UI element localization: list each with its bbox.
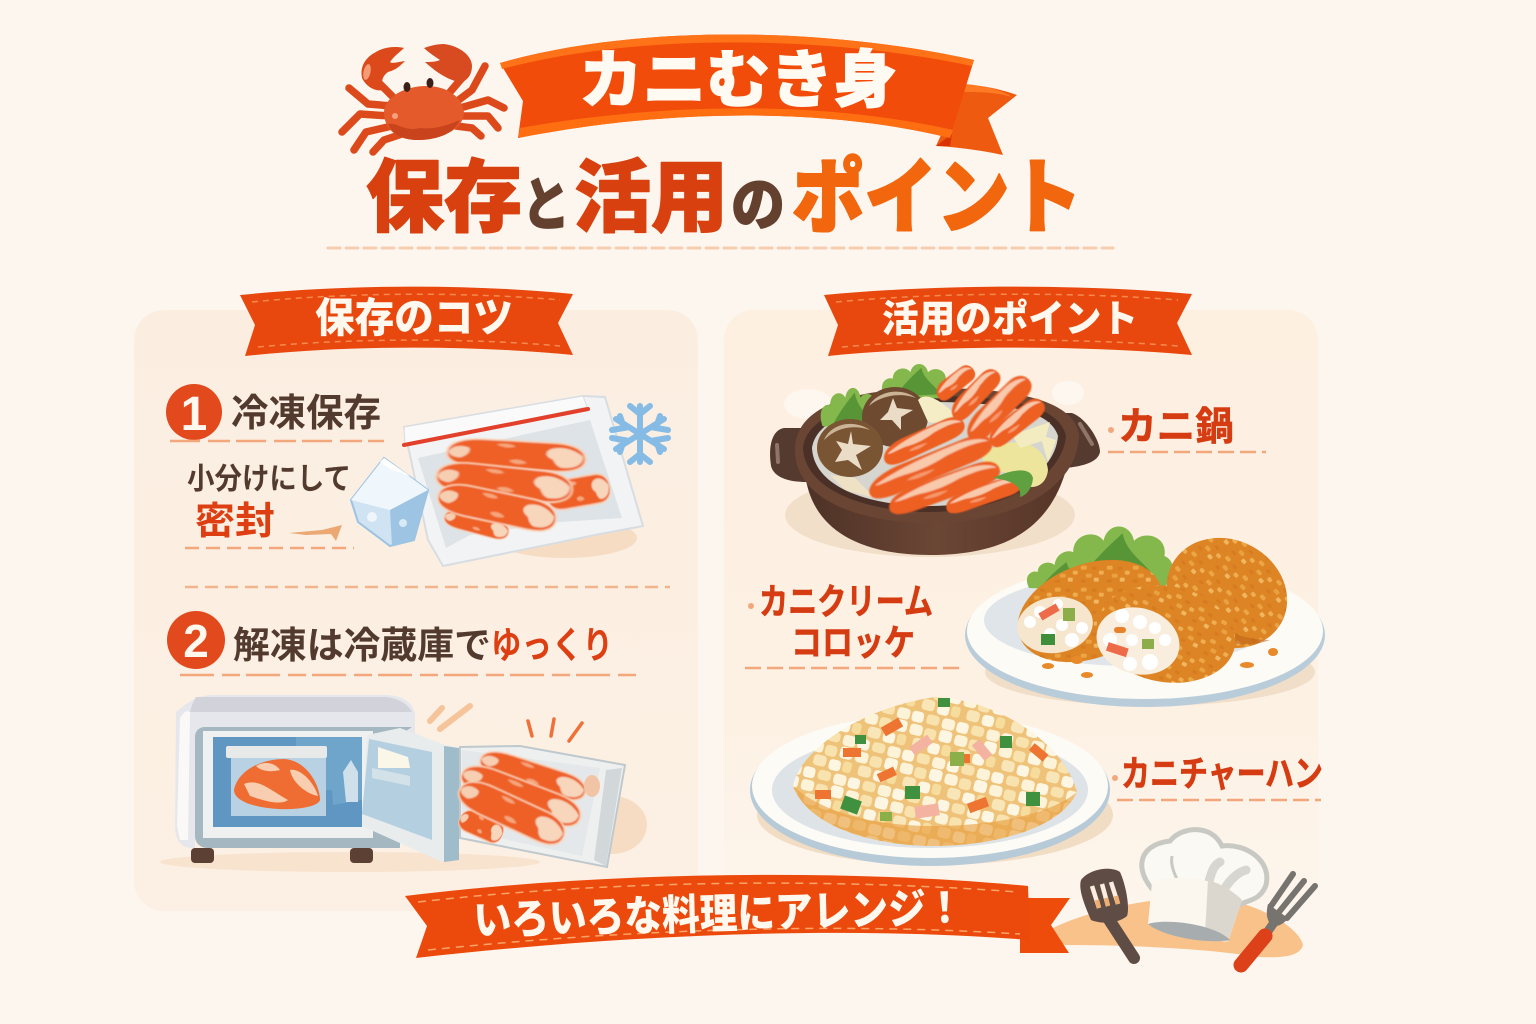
- croquette left: [1003, 541, 1177, 681]
- feet: [191, 848, 214, 863]
- number badge 1: 1: [181, 388, 207, 441]
- label: crab hot pot: カニ鍋: [1118, 406, 1234, 449]
- crab body: [384, 86, 464, 140]
- icon: chef hat: [1142, 830, 1267, 942]
- number badge 2: 2: [183, 615, 209, 667]
- title ribbon: [500, 34, 1017, 155]
- steam: [784, 389, 832, 419]
- icon: ice cube: [351, 458, 428, 546]
- illustration: thawing crab pack: [454, 745, 647, 867]
- rice mound: [793, 697, 1077, 846]
- left claw: [362, 47, 405, 90]
- left section heading ribbon: [240, 287, 573, 356]
- right section heading ribbon: 活用のポイント: [882, 299, 1138, 341]
- bottom banner: いろいろな料理にアレンジ！: [473, 884, 964, 944]
- left section heading ribbon: 保存のコツ: [315, 295, 513, 341]
- number badge 1: [166, 384, 222, 441]
- illustration: microwave with opened door: [160, 695, 582, 872]
- illustration: crab cream croquettes: [965, 517, 1325, 707]
- pot handles: [770, 428, 806, 482]
- motion marks: [430, 706, 470, 729]
- pot body: [806, 470, 1066, 555]
- step 1 note: 小分けにして: [187, 463, 351, 496]
- icon: spatula: [1080, 869, 1134, 958]
- rice toppings: [815, 698, 1048, 821]
- step 1 note: 密封: [195, 501, 275, 543]
- illustration: crab fried rice: [750, 697, 1113, 866]
- step 2 title: 解凍は冷蔵庫で: [233, 625, 491, 666]
- right section heading ribbon: [824, 287, 1192, 356]
- bok choy: [993, 470, 1033, 497]
- main title: 活用: [574, 153, 728, 242]
- number badge 2: [167, 611, 225, 669]
- panel: storage tips: [134, 310, 698, 911]
- step 2 heading: ゆっくり: [491, 625, 613, 666]
- step 1 note: [185, 463, 354, 548]
- croquette whole: [1147, 517, 1307, 669]
- ribbon body: [500, 34, 974, 138]
- label: crab hot pot: [1108, 406, 1266, 452]
- right claw: [424, 44, 472, 82]
- main title: ポイント: [792, 153, 1082, 244]
- croquette right: [1089, 575, 1243, 693]
- plate: [965, 563, 1325, 707]
- microwave body: [175, 695, 415, 848]
- step 1 heading: [166, 384, 384, 441]
- label: crab cream croquette: コロッケ: [791, 622, 915, 663]
- step 1 title: 冷凍保存: [231, 393, 381, 435]
- title crab icon: [342, 44, 504, 152]
- main title: と: [522, 173, 570, 238]
- label: crab cream croquette: カニクリーム: [759, 581, 933, 622]
- crab legs: [932, 362, 979, 404]
- shiitake: [817, 387, 928, 477]
- icon: fork: [1241, 874, 1315, 965]
- banner body: [405, 875, 1030, 958]
- label: crab cream croquette: [745, 581, 965, 668]
- main title: [366, 153, 1082, 244]
- main title: の: [731, 173, 785, 238]
- door: [362, 728, 459, 862]
- main title: 保存: [366, 153, 522, 242]
- banner tail: [1020, 898, 1070, 953]
- ribbon tail: [936, 84, 1017, 155]
- crumbs: [1042, 648, 1278, 678]
- bottom decoration: peach swoosh: [1052, 898, 1303, 957]
- bottom banner: [405, 875, 1070, 958]
- icon: snowflake: [612, 406, 668, 462]
- lettuce: [1054, 527, 1173, 586]
- label: crab fried rice: [1112, 753, 1323, 800]
- leaves: [821, 388, 880, 429]
- icon: freezer bag: [351, 396, 668, 566]
- label: crab fried rice: カニチャーハン: [1121, 753, 1323, 794]
- illustration: crab hot pot: [770, 362, 1100, 557]
- ribbon text: カニむき身: [579, 46, 897, 116]
- cabbage: [918, 396, 955, 423]
- step 2 heading: [167, 611, 636, 675]
- plate: [750, 714, 1110, 866]
- panel: usage points: [724, 310, 1318, 900]
